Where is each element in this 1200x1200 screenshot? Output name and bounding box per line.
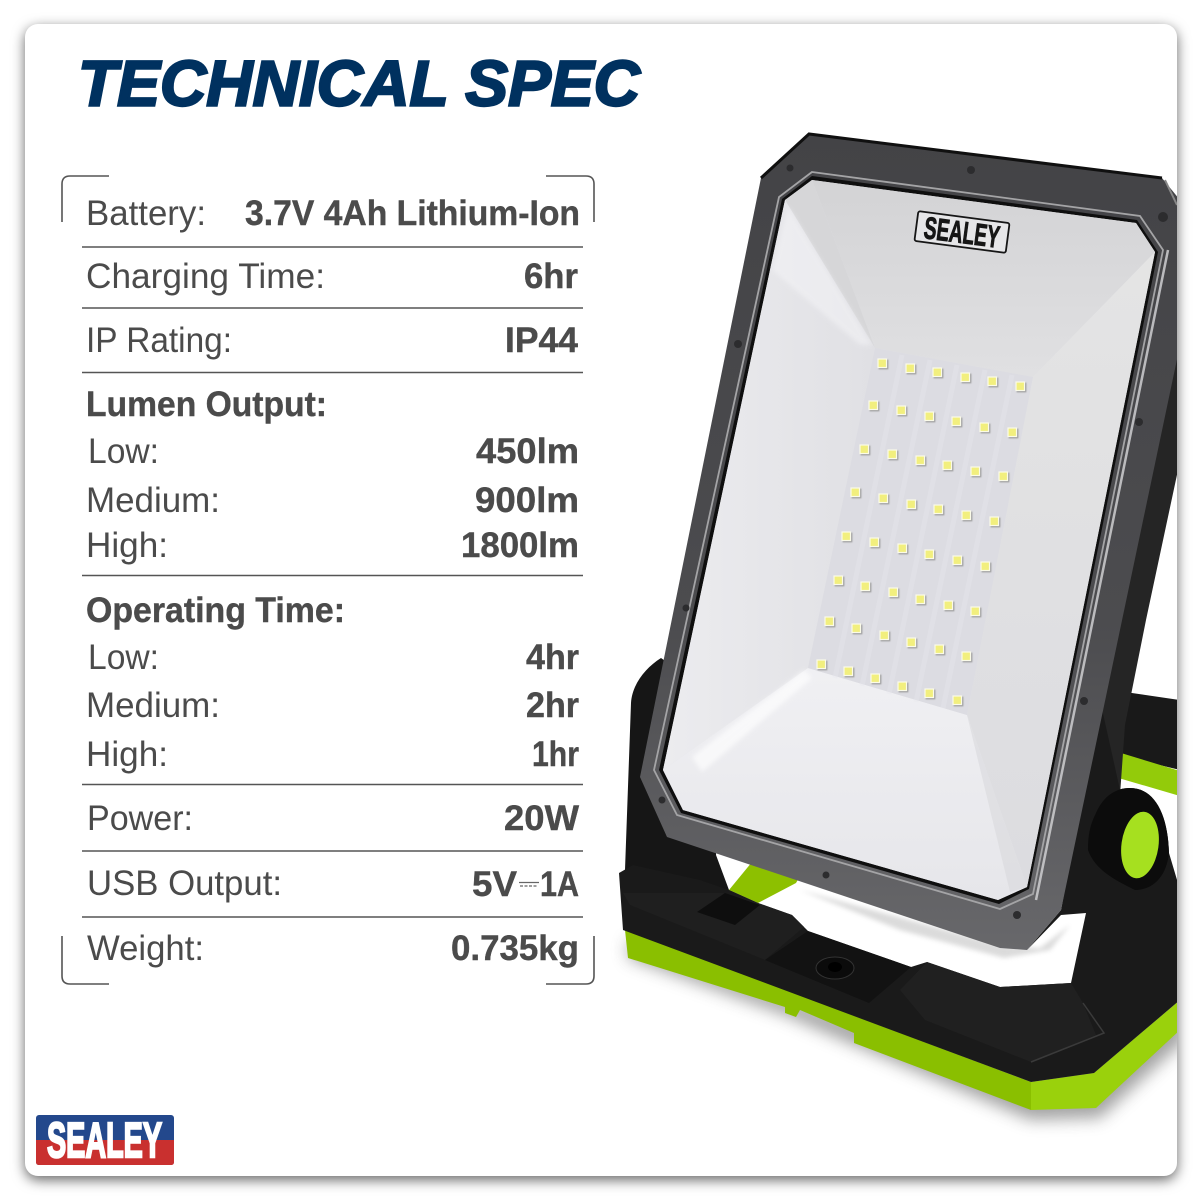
section: operating time: Medium: <box>86 686 220 725</box>
section: lumen output: Lumen Output: <box>86 385 327 424</box>
row: weight <box>87 929 579 968</box>
section: operating time: High: <box>86 735 168 774</box>
rear green foot <box>729 692 1180 903</box>
lamp frame <box>640 134 1180 950</box>
row: weight: Weight: <box>87 929 204 968</box>
row: USB output: 1A <box>540 865 579 904</box>
row: USB output <box>87 864 579 904</box>
row: weight: 0.735kg <box>451 929 579 968</box>
lamp reflector panel <box>663 180 1155 900</box>
section: operating time: Low: <box>88 638 159 677</box>
lamp badge logo <box>914 209 1010 256</box>
green base <box>625 930 1180 1110</box>
section: operating time <box>86 591 579 774</box>
Sealey logo <box>36 1114 174 1168</box>
section: operating time: 2hr <box>526 686 579 725</box>
row: charging time <box>86 257 578 296</box>
left support arm <box>625 658 758 903</box>
title: TECHNICAL SPEC <box>78 48 641 120</box>
section: operating time: 4hr <box>526 638 579 677</box>
row: charging time: 6hr <box>524 257 578 296</box>
row: battery: Battery: <box>86 194 206 233</box>
row: IP rating: IP Rating: <box>86 321 232 360</box>
row: power <box>87 799 579 838</box>
section: lumen output <box>86 385 579 565</box>
row: USB output: USB Output: <box>87 864 282 903</box>
section: lumen output: High: <box>86 526 168 565</box>
row: battery <box>86 194 580 233</box>
section: operating time: Operating Time: <box>86 591 345 630</box>
section: lumen output: 900lm <box>475 481 579 520</box>
section: lumen output: 1800lm <box>461 526 579 565</box>
section: lumen output: Medium: <box>86 481 220 520</box>
black base and right upright <box>619 700 1180 1082</box>
section: lumen output: Low: <box>88 432 159 471</box>
row: USB output: 5V <box>472 865 518 904</box>
section: lumen output: 450lm <box>476 432 579 471</box>
LED board <box>816 358 1028 708</box>
green pivot knob <box>1121 812 1159 878</box>
lamp rear housing <box>1102 360 1177 790</box>
spec table <box>62 176 594 984</box>
row: IP rating <box>86 321 579 360</box>
Sealey logo: SEALEY <box>47 1114 162 1168</box>
lamp badge logo: SEALEY <box>922 210 1002 255</box>
product photo: work light <box>619 134 1185 1120</box>
row: charging time: Charging Time: <box>86 257 325 296</box>
row: IP rating: IP44 <box>505 321 579 360</box>
row: power: 20W <box>504 799 579 838</box>
row: battery: 3.7V 4Ah Lithium-Ion <box>245 194 580 233</box>
row: power: Power: <box>87 799 193 838</box>
section: operating time: 1hr <box>532 735 579 774</box>
